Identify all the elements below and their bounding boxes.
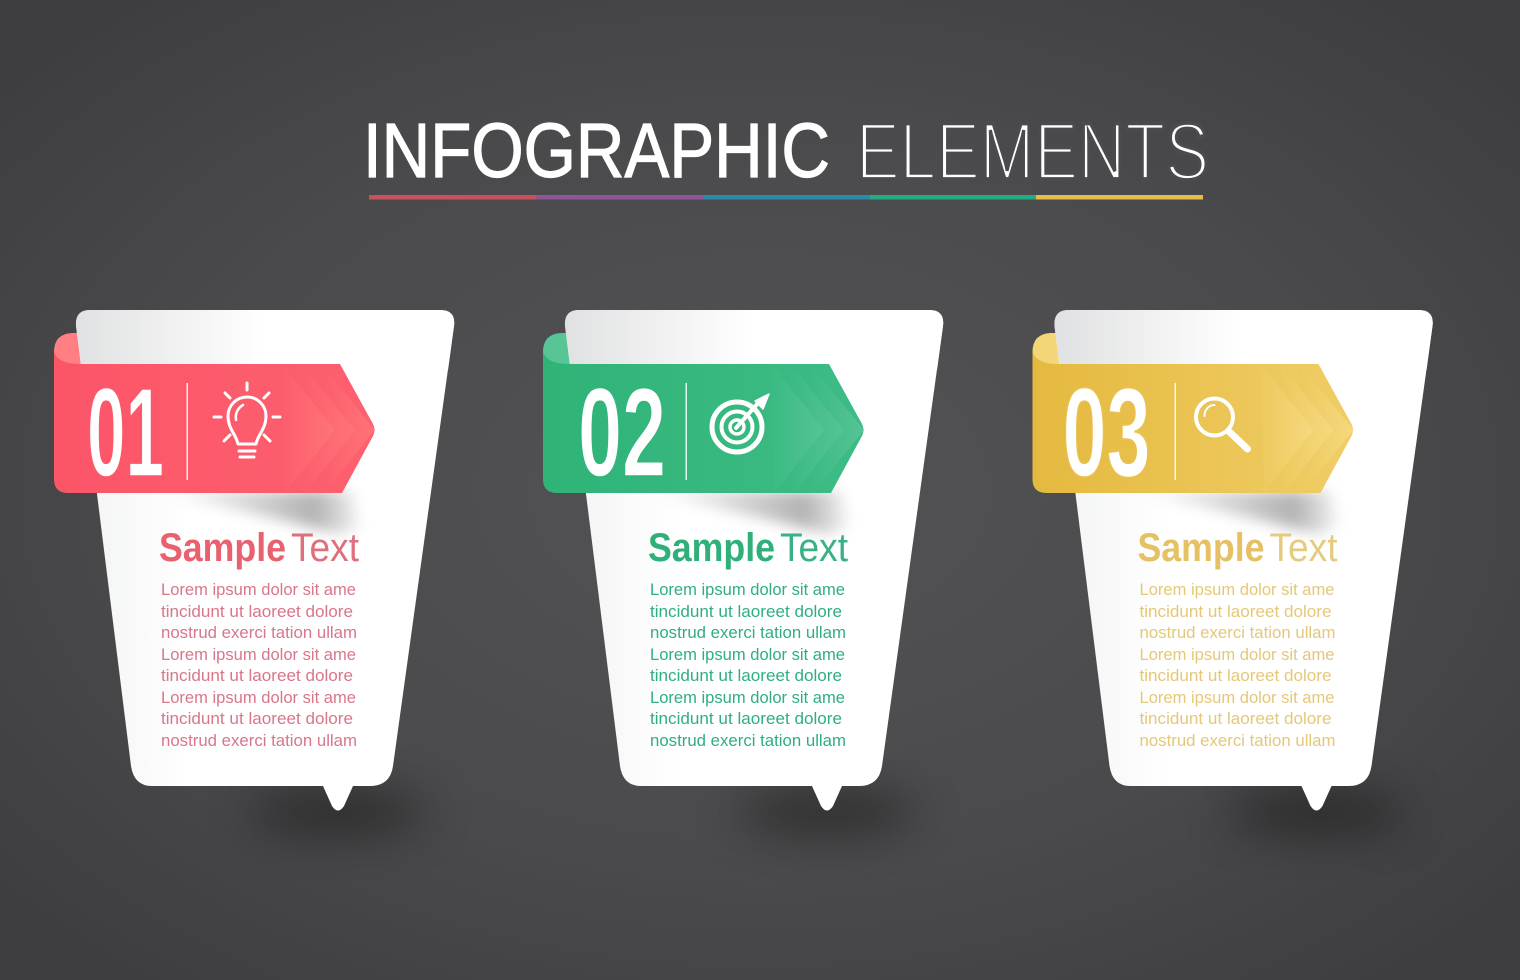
divider bbox=[186, 383, 188, 480]
title: ELEMENTS: ELEMENTS bbox=[856, 107, 1209, 197]
ribbon bbox=[1032, 352, 1353, 493]
card bbox=[1054, 310, 1433, 810]
panel: 02 bbox=[543, 310, 943, 828]
ribbon fold bbox=[54, 333, 90, 370]
floor shadow bbox=[1226, 796, 1406, 828]
panel: 03 bbox=[1032, 310, 1433, 828]
body text: nostrud exerci tation ullam bbox=[1140, 624, 1336, 642]
body text: nostrud exerci tation ullam bbox=[650, 732, 846, 750]
heading: Text bbox=[1270, 526, 1338, 570]
title underline bbox=[369, 195, 1203, 200]
icon: target with dart bbox=[712, 394, 769, 452]
body text: tincidunt ut laoreet dolore bbox=[650, 603, 842, 621]
ribbon fold bbox=[1032, 333, 1068, 370]
title bbox=[363, 107, 1209, 197]
card top shading bbox=[565, 310, 943, 370]
body text: Lorem ipsum dolor sit ame bbox=[161, 689, 356, 707]
divider bbox=[686, 383, 687, 480]
ribbon chevrons bbox=[771, 364, 864, 493]
body text: tincidunt ut laoreet dolore bbox=[161, 710, 353, 728]
body text: tincidunt ut laoreet dolore bbox=[1140, 603, 1332, 621]
body text bbox=[1140, 581, 1336, 750]
number: 02 bbox=[578, 362, 666, 503]
body text: nostrud exerci tation ullam bbox=[1140, 732, 1336, 750]
heading: Text bbox=[780, 526, 848, 570]
body text: nostrud exerci tation ullam bbox=[650, 624, 846, 642]
body text: Lorem ipsum dolor sit ame bbox=[1140, 689, 1334, 707]
ribbon chevrons bbox=[1260, 364, 1354, 493]
body text: Lorem ipsum dolor sit ame bbox=[1140, 581, 1334, 599]
heading: Sample bbox=[1138, 526, 1264, 570]
heading: Text bbox=[291, 526, 359, 570]
ribbon bbox=[543, 352, 864, 493]
number: 03 bbox=[1062, 362, 1150, 503]
floor shadow bbox=[737, 796, 917, 828]
divider bbox=[1174, 383, 1176, 480]
card top shading bbox=[1054, 310, 1433, 370]
body text: tincidunt ut laoreet dolore bbox=[161, 667, 353, 685]
body text: Lorem ipsum dolor sit ame bbox=[161, 646, 356, 664]
body text: Lorem ipsum dolor sit ame bbox=[650, 689, 845, 707]
body text: tincidunt ut laoreet dolore bbox=[1140, 667, 1332, 685]
card bbox=[76, 310, 454, 810]
body text: nostrud exerci tation ullam bbox=[161, 624, 357, 642]
ribbon fold bbox=[543, 333, 579, 370]
body text: Lorem ipsum dolor sit ame bbox=[650, 581, 845, 599]
panel: 01 bbox=[54, 310, 454, 828]
floor shadow bbox=[248, 796, 428, 828]
body text: tincidunt ut laoreet dolore bbox=[161, 603, 353, 621]
body text: tincidunt ut laoreet dolore bbox=[650, 710, 842, 728]
body text bbox=[650, 581, 846, 750]
icon: magnifying glass bbox=[1196, 398, 1248, 449]
body text: nostrud exerci tation ullam bbox=[161, 732, 357, 750]
card top shading bbox=[76, 310, 454, 370]
ribbon chevrons bbox=[282, 364, 375, 493]
icon: light bulb bbox=[214, 383, 280, 457]
heading: Sample bbox=[159, 526, 286, 570]
body text: Lorem ipsum dolor sit ame bbox=[650, 646, 845, 664]
body text: tincidunt ut laoreet dolore bbox=[650, 667, 842, 685]
title: INFOGRAPHIC: INFOGRAPHIC bbox=[363, 108, 830, 194]
body text bbox=[161, 581, 357, 750]
body text: Lorem ipsum dolor sit ame bbox=[1140, 646, 1334, 664]
card bbox=[565, 310, 943, 810]
ribbon shadow bbox=[644, 491, 849, 534]
ribbon shadow bbox=[1134, 491, 1338, 534]
ribbon bbox=[54, 352, 374, 493]
ribbon shadow bbox=[155, 491, 360, 534]
heading: Sample bbox=[648, 526, 775, 570]
body text: Lorem ipsum dolor sit ame bbox=[161, 581, 356, 599]
number: 01 bbox=[87, 362, 164, 503]
body text: tincidunt ut laoreet dolore bbox=[1140, 710, 1332, 728]
